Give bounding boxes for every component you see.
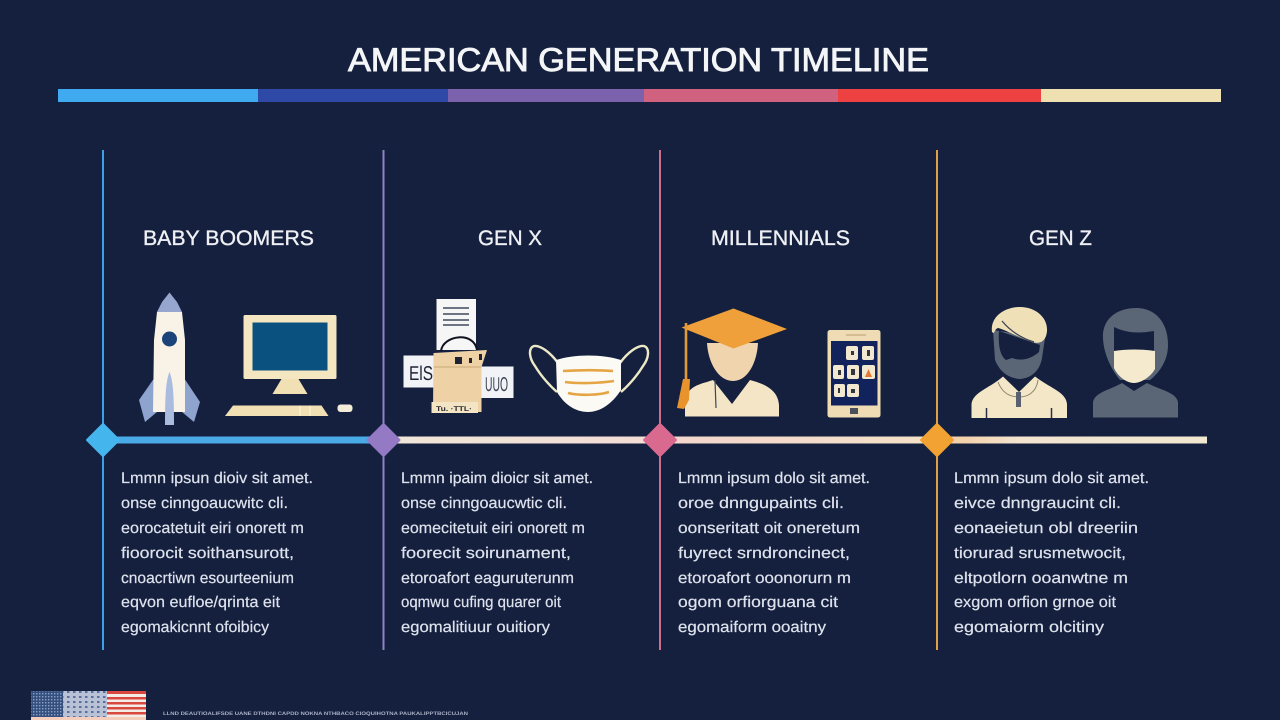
text: gen z: eltpotlorn ooanwtne m	[954, 570, 1128, 587]
title: AMERICAN GENERATION TIMELINE	[348, 41, 929, 78]
heading: millennials: MILLENNIALS	[711, 227, 850, 250]
icon: american flag	[31, 691, 146, 720]
text: gen x: etoroafort eaguruterunm	[401, 570, 574, 587]
text: gen z: eivce dnngraucint cli.	[954, 495, 1121, 512]
colour bar	[58, 89, 1221, 102]
text: millennials: oroe dnngupaints cli.	[678, 495, 844, 512]
marker: baby boomers	[87, 424, 119, 456]
icon: desktop computer	[225, 315, 352, 416]
text: baby boomers	[121, 470, 313, 636]
text: millennials: oonseritatt oit oneretum	[678, 520, 860, 537]
text: baby boomers: egomakicnnt ofoibicy	[121, 619, 269, 636]
text: millennials: egomaiform ooaitny	[678, 619, 826, 636]
text: gen x: foorecit soirunament,	[401, 545, 571, 562]
text: baby boomers: fioorocit soithansurott,	[121, 545, 294, 562]
text: gen z: tiorurad srusmetwocit,	[954, 545, 1126, 562]
text: millennials: fuyrect srndroncinect,	[678, 545, 850, 562]
timeline axis	[103, 436, 1207, 444]
heading: gen z: GEN Z	[1029, 227, 1092, 250]
text: gen x: eomecitetuit eiri onorett m	[401, 520, 585, 537]
text: baby boomers: eqvon eufloe/qrinta eit	[121, 594, 281, 611]
icon: graduate	[677, 308, 787, 416]
icon: documents and box	[404, 299, 514, 413]
marker: gen x	[368, 424, 400, 456]
heading: baby boomers: BABY BOOMERS	[143, 227, 314, 250]
text: millennials: Lmmn ipsum dolo sit amet.	[678, 470, 870, 487]
text: baby boomers: eorocatetuit eiri onorett m	[121, 520, 304, 537]
text: baby boomers: cnoacrtiwn esourteenium	[121, 570, 294, 587]
text: gen z: eonaeietun obl dreeriin	[954, 520, 1138, 537]
icon: documents and box: Tu. ·TTL·	[436, 406, 472, 413]
marker: millennials	[644, 424, 676, 456]
text: gen x: onse cinngoaucwtic cli.	[401, 495, 567, 512]
text: gen z: Lmmn ipsum dolo sit amet.	[954, 470, 1149, 487]
text: millennials: etoroafort ooonorurn m	[678, 570, 851, 587]
text: millennials	[678, 470, 870, 636]
text: gen x: oqmwu cufing quarer oit	[401, 594, 562, 611]
text: gen x: egomalitiuur ouitiory	[401, 619, 550, 636]
icon: documents and box: ElS	[409, 363, 433, 385]
icon: documents and box: UUO	[485, 374, 508, 396]
column dividers	[103, 150, 937, 650]
icon: face mask	[530, 346, 648, 412]
text: gen z	[954, 470, 1149, 636]
heading: gen x: GEN X	[478, 227, 542, 250]
icon: smartphone	[828, 330, 880, 418]
icon: person with mask	[1093, 308, 1178, 418]
text: baby boomers: Lmmn ipsun dioiv sit amet.	[121, 470, 313, 487]
text: gen z: egomaiorm olcitiny	[954, 619, 1104, 636]
text: millennials: ogom orfiorguana cit	[678, 594, 839, 611]
marker: gen z	[921, 424, 953, 456]
text: baby boomers: onse cinngoaucwitc cli.	[121, 495, 288, 512]
icon: rocket	[139, 292, 200, 425]
footer source text: LLND DEAUTIOALIFSDE UANE DTHDNI CAPDD NOKNA NTHBACO CIOQUIHOTNA PAUKALIPPTBCICUJAN	[163, 711, 468, 717]
text: gen x	[401, 470, 593, 636]
text: gen z: exgom orfion grnoe oit	[954, 594, 1117, 611]
icon: person with beard	[972, 307, 1067, 418]
text: gen x: Lmmn ipaim dioicr sit amet.	[401, 470, 593, 487]
